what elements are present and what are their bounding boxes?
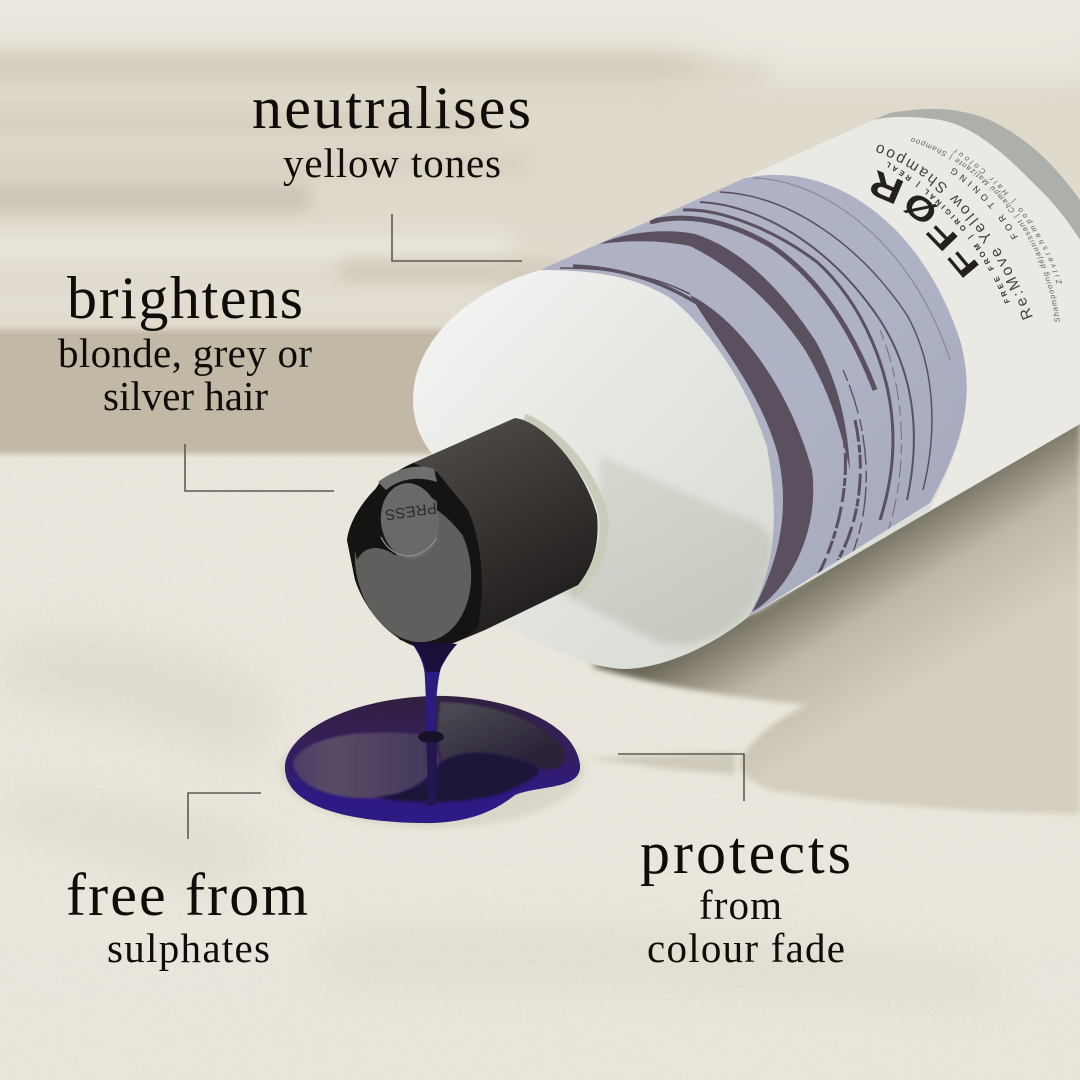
- cap cylinder: [347, 418, 598, 650]
- text block: brightens blonde, grey or silver hair: blonde, grey or: [58, 330, 312, 376]
- top lip: [378, 467, 437, 490]
- text block: neutralises yellow tones: [252, 75, 531, 186]
- bottle cast shadow: [588, 400, 1080, 814]
- neck collar: [524, 418, 604, 594]
- brush strokes: [560, 178, 950, 612]
- bottle: [413, 108, 1080, 669]
- PRESS lettering: PRESS: [384, 499, 438, 523]
- grey highlight: [437, 702, 566, 769]
- text block: neutralises yellow tones: neutralises: [252, 75, 531, 141]
- grey flip-top disc: [340, 478, 486, 654]
- callout line: protects: [618, 754, 744, 801]
- label typography: Ø: [896, 184, 944, 233]
- callout line: free from: [188, 793, 261, 839]
- text block: protects from colour fade: from: [699, 882, 782, 928]
- pouring stream: [411, 642, 457, 745]
- callout line: brightens: [185, 444, 334, 491]
- dark reflection: [376, 753, 539, 802]
- droplet: [418, 731, 444, 743]
- bottle body: [413, 109, 1080, 669]
- label typography: F: [920, 213, 965, 258]
- grey end band: [873, 109, 1080, 240]
- text block: protects from colour fade: colour fade: [647, 925, 845, 971]
- text block: free from sulphates: sulphates: [107, 925, 270, 971]
- text block: brightens blonde, grey or silver hair: [58, 265, 312, 419]
- label typography: F: [942, 240, 986, 284]
- lilac sheen: [293, 733, 440, 798]
- white label: [740, 117, 1080, 510]
- label typography: Shampooing déjaunissant | Champú Matizante | Shampoo: [911, 138, 1060, 322]
- label typography: Re:Move Yellow Shampoo: [876, 144, 1033, 320]
- text block: protects from colour fade: protects: [640, 820, 851, 886]
- label typography: FOR TONING: [951, 168, 1018, 240]
- text block: free from sulphates: [66, 862, 308, 971]
- lavender brush label: [540, 175, 967, 617]
- shoulder shadow wedge: [560, 455, 772, 645]
- dark notch right of button: [437, 485, 470, 545]
- dark recess: [350, 472, 420, 560]
- text block: protects from colour fade: [640, 820, 851, 971]
- label typography: FREE FROM | ORIGINAL | REAL: [887, 162, 1010, 304]
- text block: brightens blonde, grey or silver hair: silver hair: [103, 373, 268, 419]
- label typography: Zilvershampoo | Hair Colour: [953, 150, 1062, 284]
- press groove: [381, 537, 437, 556]
- stream reflection: [426, 742, 437, 806]
- black rim: [347, 463, 482, 648]
- purple shampoo puddle: [280, 642, 584, 828]
- text block: neutralises yellow tones: yellow tones: [283, 140, 501, 186]
- text block: brightens blonde, grey or silver hair: brightens: [67, 265, 303, 331]
- label typography: R: [863, 162, 909, 212]
- stream top dark: [411, 642, 457, 672]
- dispensing cap: [340, 418, 598, 654]
- text block: free from sulphates: free from: [66, 862, 308, 928]
- callout line: neutralises: [392, 214, 522, 261]
- press button: [376, 479, 444, 563]
